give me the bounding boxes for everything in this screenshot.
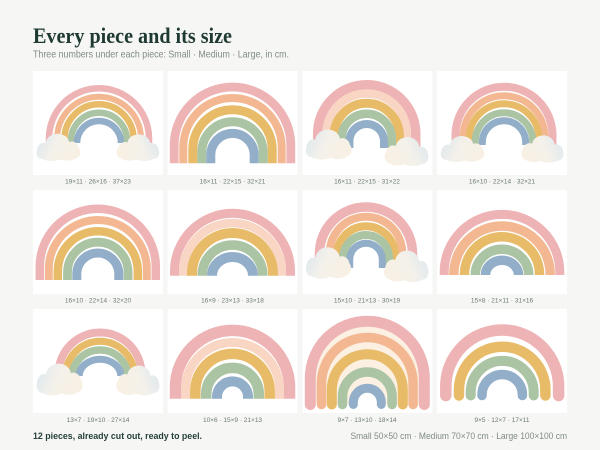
subtitle: Three numbers under each piece: Small · Medium · Large, in cm. bbox=[33, 48, 289, 60]
panel: piece 10 bbox=[168, 309, 298, 424]
panel: piece 7 bbox=[302, 190, 432, 304]
rainbow 1 bbox=[49, 88, 149, 143]
rainbow 9 bbox=[58, 333, 142, 376]
rainbow 10 bbox=[176, 330, 290, 399]
size label 9: 13×7 · 19×10 · 27×14 bbox=[67, 417, 130, 424]
title: Every piece and its size bbox=[33, 23, 232, 48]
size label 6: 16×9 · 23×13 · 33×18 bbox=[201, 298, 264, 304]
clouds 9 bbox=[37, 364, 159, 395]
size label 10: 10×6 · 15×9 · 21×13 bbox=[203, 417, 262, 424]
clouds 7 bbox=[306, 247, 428, 282]
panel: piece 12 bbox=[437, 309, 567, 424]
rainbow 2 bbox=[174, 87, 291, 163]
panel: piece 9 bbox=[33, 309, 163, 424]
rainbow 12 bbox=[446, 330, 559, 396]
size legend: Small 50×50 cm · Medium 70×70 cm · Large 100×100 cm bbox=[350, 431, 567, 441]
clouds 1 bbox=[37, 134, 159, 161]
size label 3: 16×11 · 22×15 · 31×22 bbox=[334, 178, 400, 185]
size label 4: 16×10 · 22×14 · 32×21 bbox=[469, 178, 536, 185]
rainbow 4 bbox=[456, 87, 552, 145]
panel: piece 5 bbox=[33, 190, 163, 304]
panel: piece 8 bbox=[437, 190, 567, 304]
rainbow 6 bbox=[174, 213, 290, 276]
rainbow 8 bbox=[444, 214, 560, 275]
rainbow 7 bbox=[320, 207, 412, 268]
panel: piece 1 bbox=[33, 71, 163, 185]
panel: piece 6 bbox=[168, 190, 298, 304]
clouds 4 bbox=[441, 135, 563, 163]
clouds 3 bbox=[306, 130, 428, 166]
size label 1: 19×11 · 26×16 · 37×23 bbox=[65, 178, 131, 185]
size label 11: 9×7 · 13×10 · 18×14 bbox=[337, 417, 397, 424]
size label 5: 16×10 · 22×14 · 32×20 bbox=[65, 298, 132, 304]
panel: piece 11 bbox=[302, 309, 432, 424]
size label 12: 9×5 · 12×7 · 17×11 bbox=[474, 417, 530, 424]
size label 8: 15×8 · 21×11 · 31×16 bbox=[471, 298, 533, 304]
panel: piece 2 bbox=[168, 71, 298, 185]
rainbow 3 bbox=[318, 85, 416, 148]
size label 2: 16×11 · 22×15 · 32×21 bbox=[200, 178, 266, 185]
rainbow 11 bbox=[310, 321, 424, 412]
rainbow 5 bbox=[40, 209, 156, 280]
size label 7: 15×10 · 21×13 · 30×19 bbox=[334, 298, 401, 304]
panel: piece 3 bbox=[302, 71, 432, 185]
panel: piece 4 bbox=[437, 71, 567, 185]
footer note: 12 pieces, already cut out, ready to peel. bbox=[33, 431, 202, 442]
